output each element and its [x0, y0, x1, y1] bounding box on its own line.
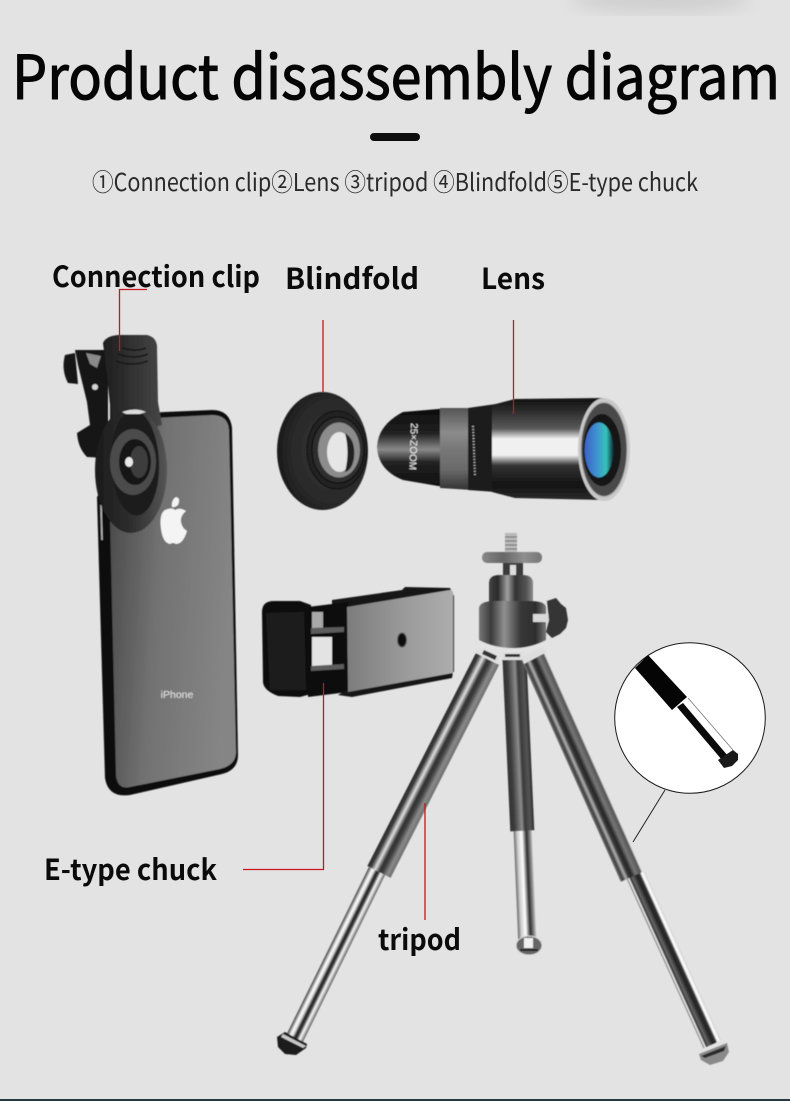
- plate lip: [338, 672, 453, 697]
- main barrel: [492, 398, 604, 500]
- label: e-type chuck: [44, 683, 324, 889]
- leg hinge collar: [474, 647, 547, 664]
- clip knob and spring jaw: [64, 350, 108, 458]
- title dash: [370, 133, 420, 141]
- clip lens: [110, 429, 156, 495]
- clip grip ridges: [116, 348, 148, 364]
- detail callout circle: [615, 643, 765, 842]
- iPhone wordmark: iPhone: [161, 689, 194, 701]
- mounting screw: [505, 533, 517, 555]
- subtitle: parts list: ①Connection clip②Lens ③tripod ④Blindfold⑤E-type chuck: [92, 164, 698, 199]
- callout leader: [633, 790, 665, 842]
- zoom text on barrel: 25×ZOOM: [406, 423, 419, 470]
- front ring: [578, 398, 630, 501]
- ball head: [489, 575, 533, 604]
- left leg: [277, 653, 499, 1055]
- phone with connection clip: [64, 335, 238, 795]
- label: blindfold: Blindfold: [285, 256, 419, 298]
- slide frame: [308, 602, 348, 697]
- blue glass: [584, 422, 614, 478]
- lock knob: [533, 598, 568, 638]
- label: connection clip: Connection clip: [52, 254, 260, 296]
- clip upper body: [103, 335, 162, 440]
- rear rail: [332, 587, 454, 694]
- mount hole: [398, 633, 406, 647]
- label: e-type chuck: E-type chuck: [44, 847, 217, 889]
- telescope lens: [377, 398, 630, 501]
- scale ring: [468, 404, 496, 492]
- base cylinder: [479, 601, 546, 648]
- neck: [503, 563, 523, 576]
- label: lens: Lens: [481, 256, 545, 298]
- left jaw block: [262, 601, 311, 697]
- label: blindfold: [285, 256, 419, 392]
- thumb disc: [482, 552, 542, 563]
- tripod: [277, 533, 729, 1065]
- phone body: [97, 410, 238, 795]
- label: connection clip: [52, 254, 260, 351]
- focus band: [440, 408, 472, 490]
- apple logo: [160, 497, 187, 544]
- eye cup (blindfold): [277, 392, 368, 510]
- leg tip detail: [635, 655, 738, 768]
- right leg: [522, 650, 729, 1065]
- plate: [347, 590, 453, 692]
- clip ring: [95, 407, 167, 533]
- eyepiece section: [377, 408, 450, 488]
- middle leg: [503, 658, 542, 955]
- phone holder (E-type chuck): [262, 587, 454, 697]
- label: tripod: tripod: [378, 917, 461, 959]
